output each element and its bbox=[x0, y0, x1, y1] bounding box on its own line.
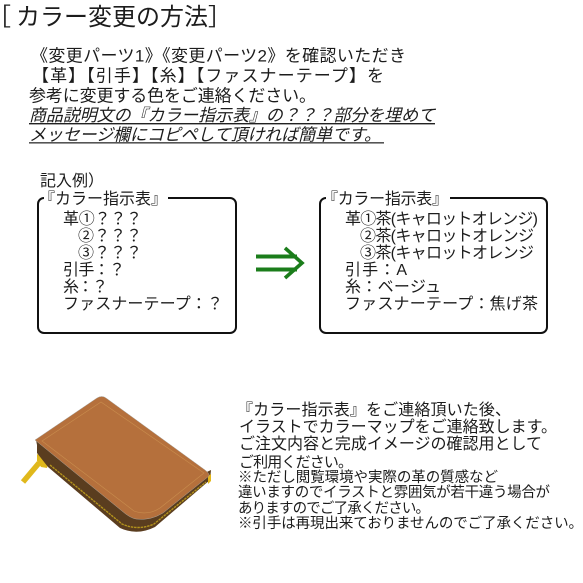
zipper pull bbox=[23, 463, 39, 482]
form lines before: 革①？？？ bbox=[63, 210, 142, 228]
icon: leather wallet illustration bbox=[23, 396, 211, 532]
leather flap bbox=[35, 396, 209, 519]
explanation text block: 違いますのでイラストと雰囲気が若干違う場合が bbox=[238, 484, 550, 501]
form lines before: ②？？？ bbox=[78, 227, 142, 245]
panel heading before: 『カラー指示表』 bbox=[39, 190, 167, 208]
explanation text block: ありますのでご了承ください。 bbox=[238, 500, 430, 517]
panel heading after: 『カラー指示表』 bbox=[322, 190, 448, 208]
form lines before: ファスナーテープ：？ bbox=[63, 295, 223, 313]
explanation text block: ご利用ください。 bbox=[239, 454, 353, 471]
form lines before: 糸：？ bbox=[63, 278, 108, 296]
explanation text block: ※引手は再現出来ておりませんのでご了承ください。 bbox=[238, 515, 583, 532]
zipper stitching bbox=[50, 465, 206, 528]
instructions text block: 参考に変更する色をご連絡ください。 bbox=[29, 86, 316, 106]
wallet body bbox=[36, 440, 211, 532]
title: ］ bbox=[208, 4, 232, 31]
form lines after: ファスナーテープ：焦げ茶 bbox=[345, 295, 538, 313]
instructions text block: 商品説明文の『カラー指示表』の？？？部分を埋めて bbox=[29, 106, 437, 125]
form lines after bbox=[345, 210, 538, 313]
explanation text block bbox=[237, 401, 583, 532]
instructions text block: 《変更パーツ1》《変更パーツ2》を確認いただき bbox=[31, 46, 406, 66]
instructions text block bbox=[29, 46, 437, 144]
instructions text block: メッセージ欄にコピペして頂ければ簡単です。 bbox=[29, 126, 381, 144]
panel: example form after bbox=[320, 190, 547, 333]
panel: example form before bbox=[38, 190, 236, 333]
flap stitching bbox=[42, 402, 204, 513]
form lines before: ③？？？ bbox=[78, 244, 142, 262]
form lines before: 引手：？ bbox=[63, 261, 125, 279]
form lines after: ②茶(キャロットオレンジ bbox=[360, 227, 534, 245]
explanation text block: 『カラー指示表』をご連絡頂いた後、 bbox=[237, 401, 511, 419]
explanation text block: ※ただし閲覧環境や実際の革の質感など bbox=[238, 468, 498, 486]
arrow bbox=[256, 248, 302, 278]
zipper end bbox=[208, 474, 211, 484]
form lines after: ③茶(キャロットオレンジ bbox=[360, 244, 534, 262]
form lines after: 引手：A bbox=[345, 261, 407, 279]
explanation text block: イラストでカラーマップをご連絡致します。 bbox=[239, 418, 557, 436]
form lines before bbox=[63, 210, 223, 313]
form lines after: 革①茶(キャロットオレンジ) bbox=[345, 210, 538, 228]
form lines after: 糸：ベージュ bbox=[345, 278, 441, 296]
instructions text block: 【革】【引手】【糸】【ファスナーテープ】を bbox=[32, 66, 384, 86]
example label: 記入例） bbox=[40, 172, 104, 190]
title: カラー変更の方法 bbox=[16, 4, 208, 31]
explanation text block: ご注文内容と完成イメージの確認用として bbox=[239, 435, 542, 453]
